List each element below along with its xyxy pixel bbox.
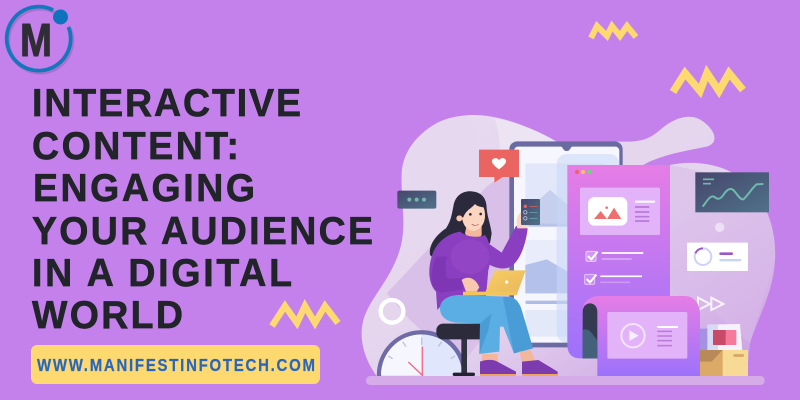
woman on stool xyxy=(429,191,558,376)
website banner: WWW.MANIFESTINFOTECH.COM xyxy=(37,356,315,375)
small dot xyxy=(715,223,724,232)
donut card xyxy=(687,243,748,271)
forearm xyxy=(431,257,463,293)
right shoe xyxy=(522,360,558,376)
like bubble xyxy=(479,150,519,183)
background blob xyxy=(362,115,775,376)
jeans xyxy=(440,295,533,354)
raised arm xyxy=(487,226,528,268)
neck xyxy=(465,225,482,239)
title: YOUR AUDIENCE xyxy=(32,209,373,253)
logo: M xyxy=(20,14,52,66)
left shoe xyxy=(480,360,516,376)
hand xyxy=(517,212,530,228)
title xyxy=(32,81,373,337)
ring decoration xyxy=(381,300,403,323)
face xyxy=(462,203,485,231)
chat dots xyxy=(397,191,436,209)
chart card xyxy=(695,172,769,212)
title: CONTENT: xyxy=(32,124,239,168)
purple page xyxy=(567,165,670,358)
title: IN A DIGITAL xyxy=(32,251,292,295)
zigzag: top small xyxy=(591,26,636,38)
typing hand xyxy=(462,278,479,292)
hair xyxy=(430,191,492,259)
stool xyxy=(436,324,490,376)
zigzag: bottom xyxy=(272,306,338,326)
bangs xyxy=(461,201,486,217)
sweater xyxy=(429,232,491,310)
handheld card xyxy=(521,199,540,225)
logo xyxy=(7,7,72,73)
forward arrows xyxy=(698,298,723,310)
website banner xyxy=(31,345,320,384)
title: WORLD xyxy=(32,293,183,337)
zigzag: top large xyxy=(673,73,743,92)
title: INTERACTIVE xyxy=(32,81,301,125)
title: ENGAGING xyxy=(33,166,255,210)
box and pictures xyxy=(699,324,748,376)
illustration xyxy=(362,115,775,400)
shins xyxy=(482,350,537,365)
floor bar xyxy=(366,376,765,385)
clock xyxy=(376,330,462,376)
ear xyxy=(456,215,462,221)
video scroll xyxy=(583,296,700,376)
phone xyxy=(509,141,623,347)
laptop xyxy=(463,270,526,295)
